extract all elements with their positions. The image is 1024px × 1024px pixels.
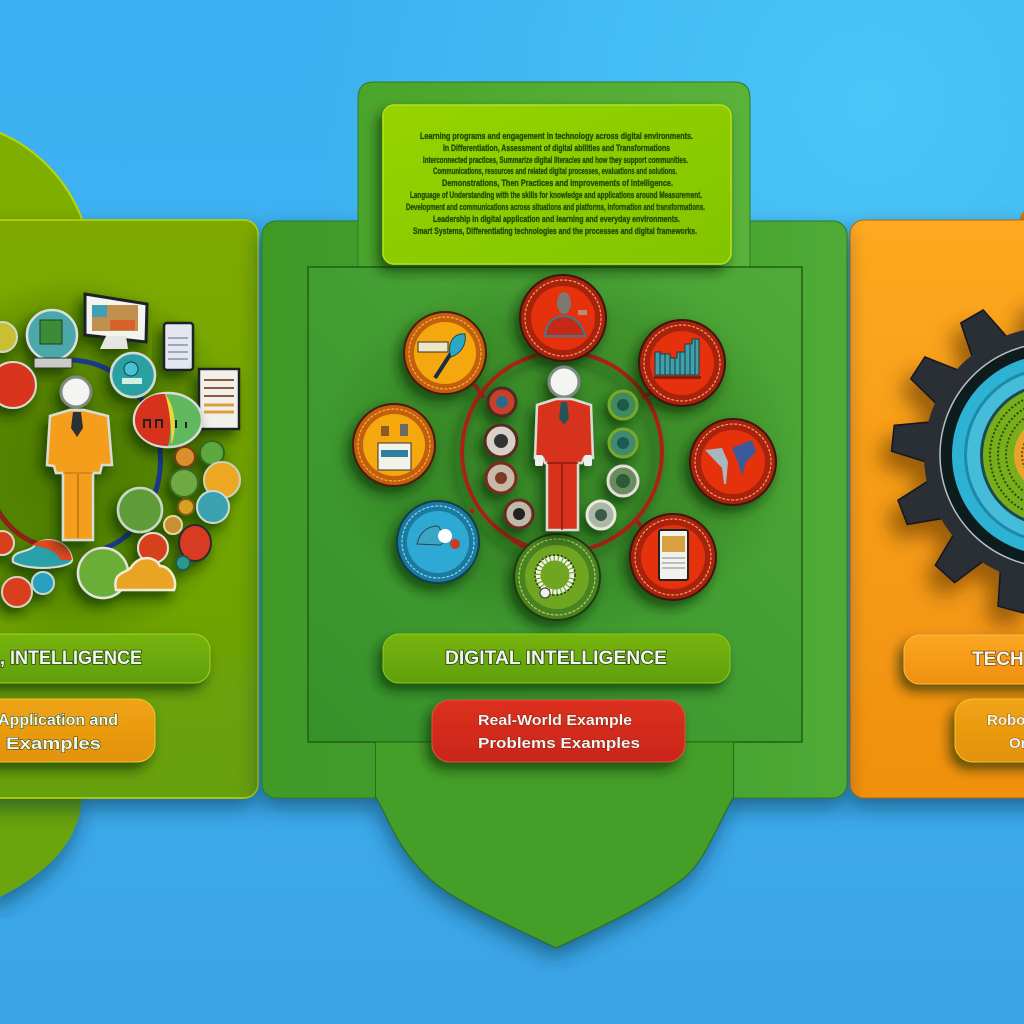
shield (376, 742, 734, 948)
body text: Language of Understanding with the skills for knowledge and applications around Measurement. (410, 190, 702, 201)
medallion: tablet (630, 514, 716, 600)
medallion: cloud (397, 501, 479, 583)
shadow behind centre illustration (320, 260, 800, 640)
small icons inside ring (485, 388, 638, 529)
subtitle pill: centre: Problems Examples (478, 735, 640, 752)
medallion: gear ring (514, 534, 600, 620)
subtitle pill: left: Application and (0, 712, 118, 729)
left illustration (0, 294, 240, 607)
body text: Communications, resources and related digital processes, evaluations and solutions. (433, 166, 677, 177)
body text: Demonstrations, Then Practices and improvements of intelligence. (442, 178, 673, 189)
body text: In Differentiation, Assessment of digital abilities and Transformations (443, 143, 670, 154)
icon: teal circle (111, 353, 155, 397)
icon: phone (164, 323, 193, 370)
panel: right (850, 220, 1024, 798)
medallion: bar chart (639, 320, 725, 406)
gear teeth (891, 294, 1024, 616)
body text (406, 131, 705, 237)
dark blue ring (68, 360, 160, 548)
back shape: left panel top tab (0, 129, 83, 222)
subtitle pill: centre: Real-World Example (478, 712, 632, 729)
medallion: person (520, 275, 606, 361)
title pill: centre (383, 634, 730, 683)
body text: Learning programs and engagement in technology across digital environments. (420, 131, 693, 142)
inner square (308, 267, 802, 742)
connectors and big ring (462, 352, 662, 552)
body text: Interconnected practices, Summarize digital literacies and how they support communities. (423, 155, 688, 166)
body text: Development and communications across situations and platforms, information and transformations. (406, 202, 705, 213)
icon: monitor (85, 294, 147, 349)
subtitle pill: left: Examples (6, 734, 101, 753)
title pill: right (904, 635, 1024, 684)
panel: centre (262, 82, 847, 948)
subtitle pill: right (955, 699, 1024, 762)
title pill: centre: DIGITAL INTELLIGENCE (445, 648, 667, 669)
medallion: world map (690, 419, 776, 505)
title pill: right: TECH (972, 649, 1024, 670)
shadow behind left illustration (0, 275, 250, 645)
medallion: paintbrush (404, 312, 486, 394)
back shape: right panel top tab (1019, 206, 1024, 222)
text box (383, 105, 731, 264)
body text: Smart Systems, Differentiating technologies and the processes and digital frameworks. (413, 226, 697, 237)
shield shadow below centre panel (376, 796, 733, 948)
subtitle pill: centre (432, 700, 685, 762)
icon: document (199, 369, 239, 429)
icon: pie chart bubble (134, 393, 202, 447)
figure: person in red suit (535, 367, 593, 530)
top tab (358, 82, 750, 267)
back shape: left panel bottom tab (0, 796, 82, 898)
figure: person in orange suit (47, 377, 112, 540)
gear (891, 294, 1024, 616)
red ring arc (0, 505, 40, 545)
medallion: notice board (353, 404, 435, 486)
centre illustration (353, 275, 776, 620)
title pill: left: , INTELLIGENCE (0, 648, 142, 669)
small icons cluster (0, 322, 240, 607)
icon: computer bubble (27, 310, 77, 368)
title pill: left (0, 634, 210, 683)
panel: left (0, 220, 258, 798)
subtitle pill: left (0, 699, 155, 762)
body text: Leadership in digital application and learning and everyday environments. (433, 214, 680, 225)
